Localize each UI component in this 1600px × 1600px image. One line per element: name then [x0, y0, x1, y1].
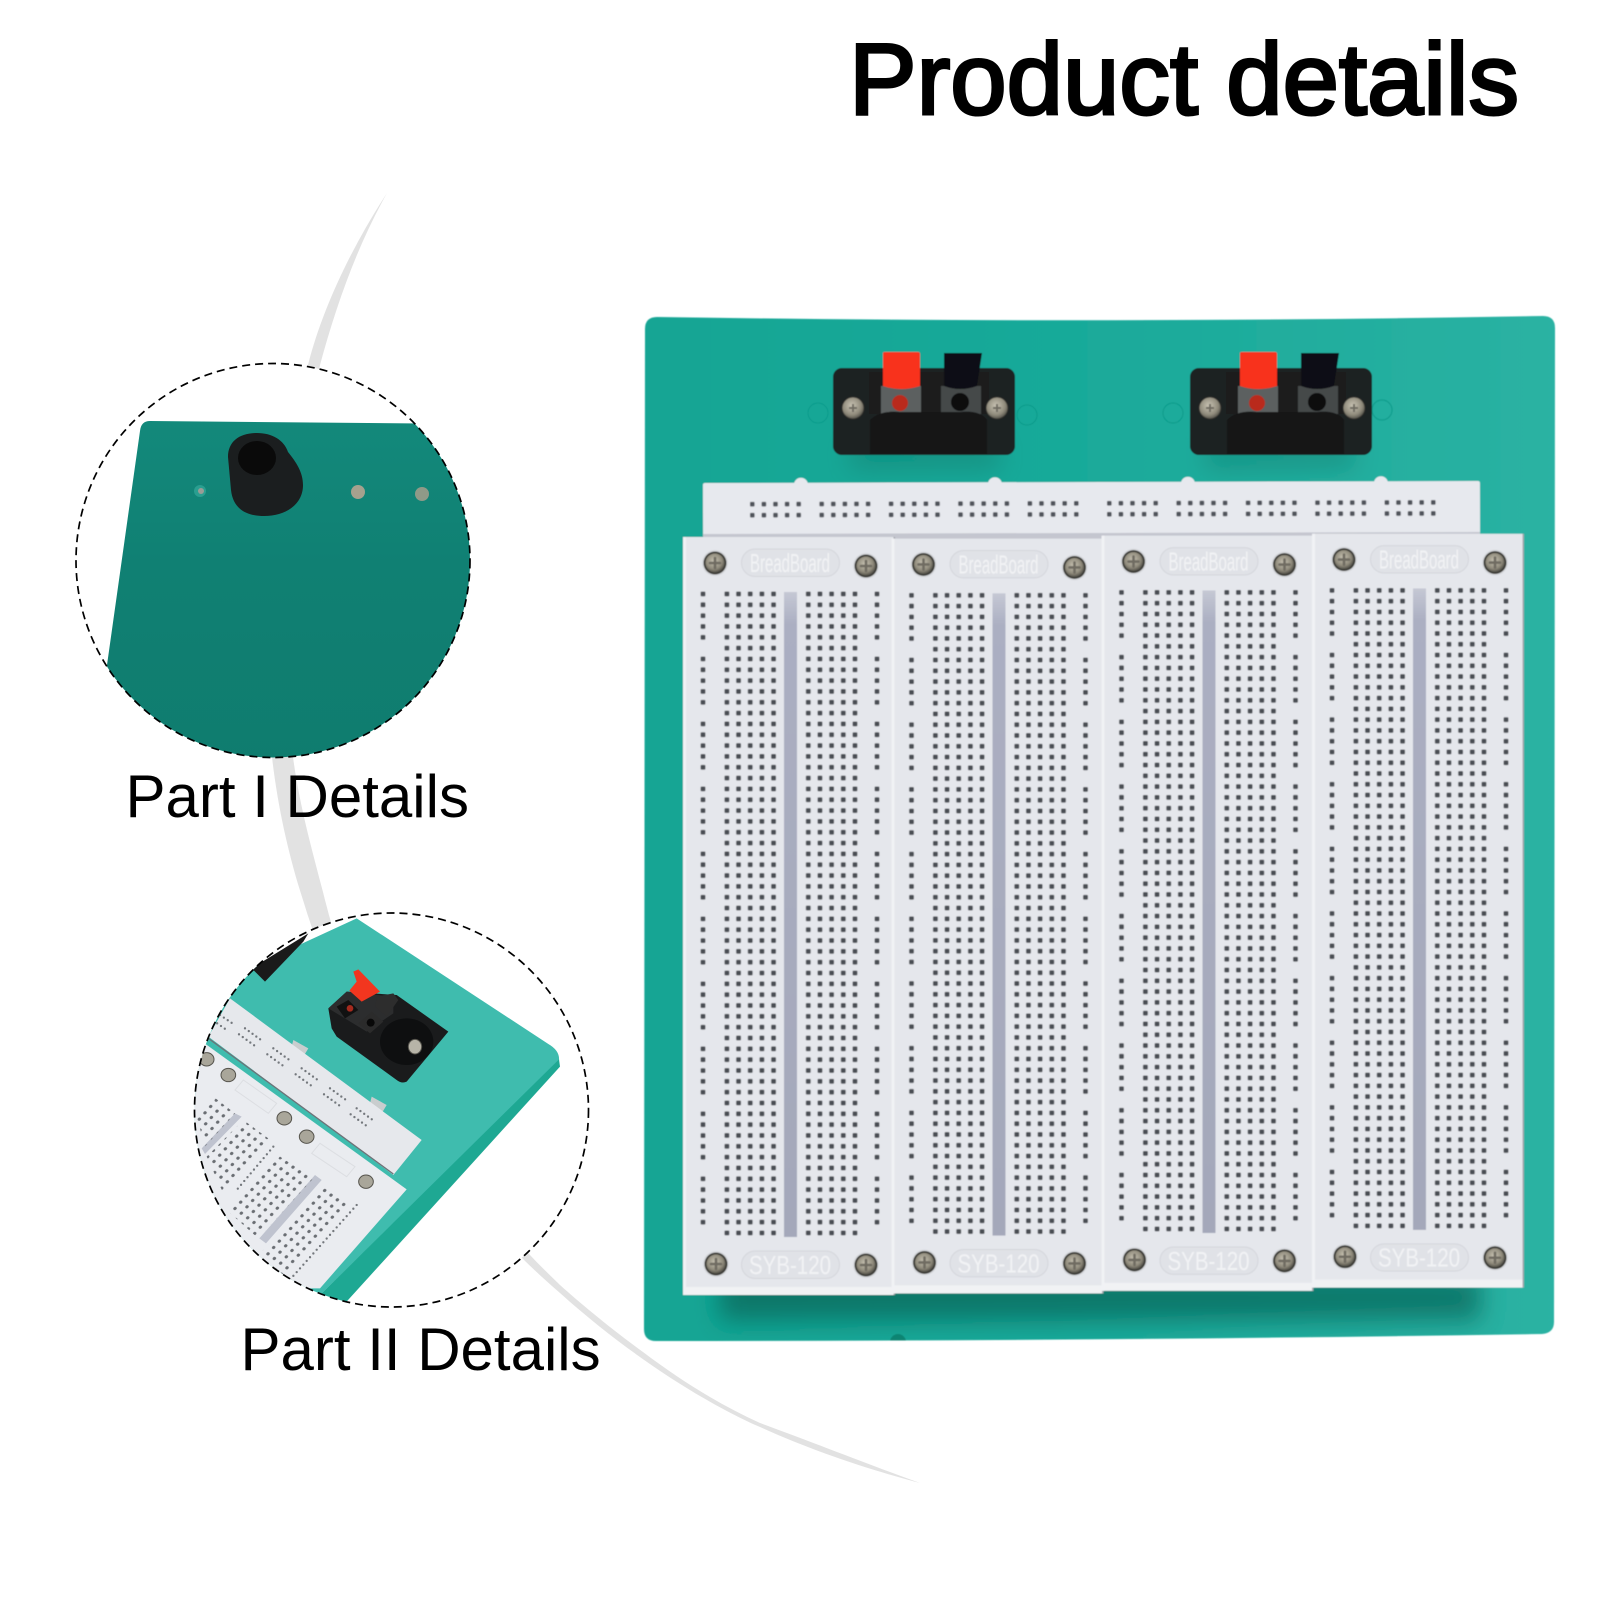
label: part I: Part I Details [126, 763, 469, 830]
breadboard module 2 [892, 539, 1104, 1293]
breadboard module 3: BreadBoard [1169, 549, 1249, 577]
strip gap [208, 1038, 393, 1174]
mounting holes [808, 400, 1392, 425]
strip tabs [292, 1040, 387, 1113]
label: part II: Part II Details [240, 1316, 601, 1383]
breadboard module 1: SYB-120 [749, 1250, 831, 1280]
rail holes [237, 1147, 357, 1283]
top power strip [703, 476, 1480, 541]
breadboard module 2: BreadBoard [959, 551, 1039, 579]
right spring terminal [1190, 352, 1372, 455]
breadboard module 1: BreadBoard [750, 548, 830, 578]
module body [180, 1040, 407, 1288]
main product: breadboard [640, 310, 1560, 1350]
slots [202, 1113, 322, 1243]
strip holes [213, 1015, 375, 1128]
breadboard module 3: SYB-120 [1168, 1248, 1250, 1276]
neighbouring terminal [252, 933, 308, 982]
breadboard module 1 [683, 537, 895, 1295]
small holes [194, 485, 429, 501]
rubber foot [228, 433, 303, 516]
decorative arc [267, 193, 920, 1483]
green base plate [640, 310, 1560, 1350]
breadboard module 4 [1312, 534, 1524, 1288]
power strip [208, 998, 422, 1175]
breadboard module 2: SYB-120 [958, 1250, 1040, 1278]
spring terminal [328, 969, 448, 1083]
breadboard module 4: SYB-120 [1378, 1245, 1460, 1273]
detail circle: part I [76, 364, 480, 780]
label pills [235, 1080, 355, 1177]
hole fields [197, 1097, 350, 1277]
plate edge [320, 1059, 560, 1303]
left spring terminal [833, 352, 1015, 455]
screws [199, 1053, 373, 1188]
breadboard module 3 [1102, 536, 1314, 1291]
plate surface [180, 918, 559, 1295]
plate corner [107, 421, 470, 758]
detail circle: part II [180, 913, 588, 1307]
title: Product details [849, 23, 1519, 136]
breadboard module 4: BreadBoard [1379, 547, 1459, 575]
